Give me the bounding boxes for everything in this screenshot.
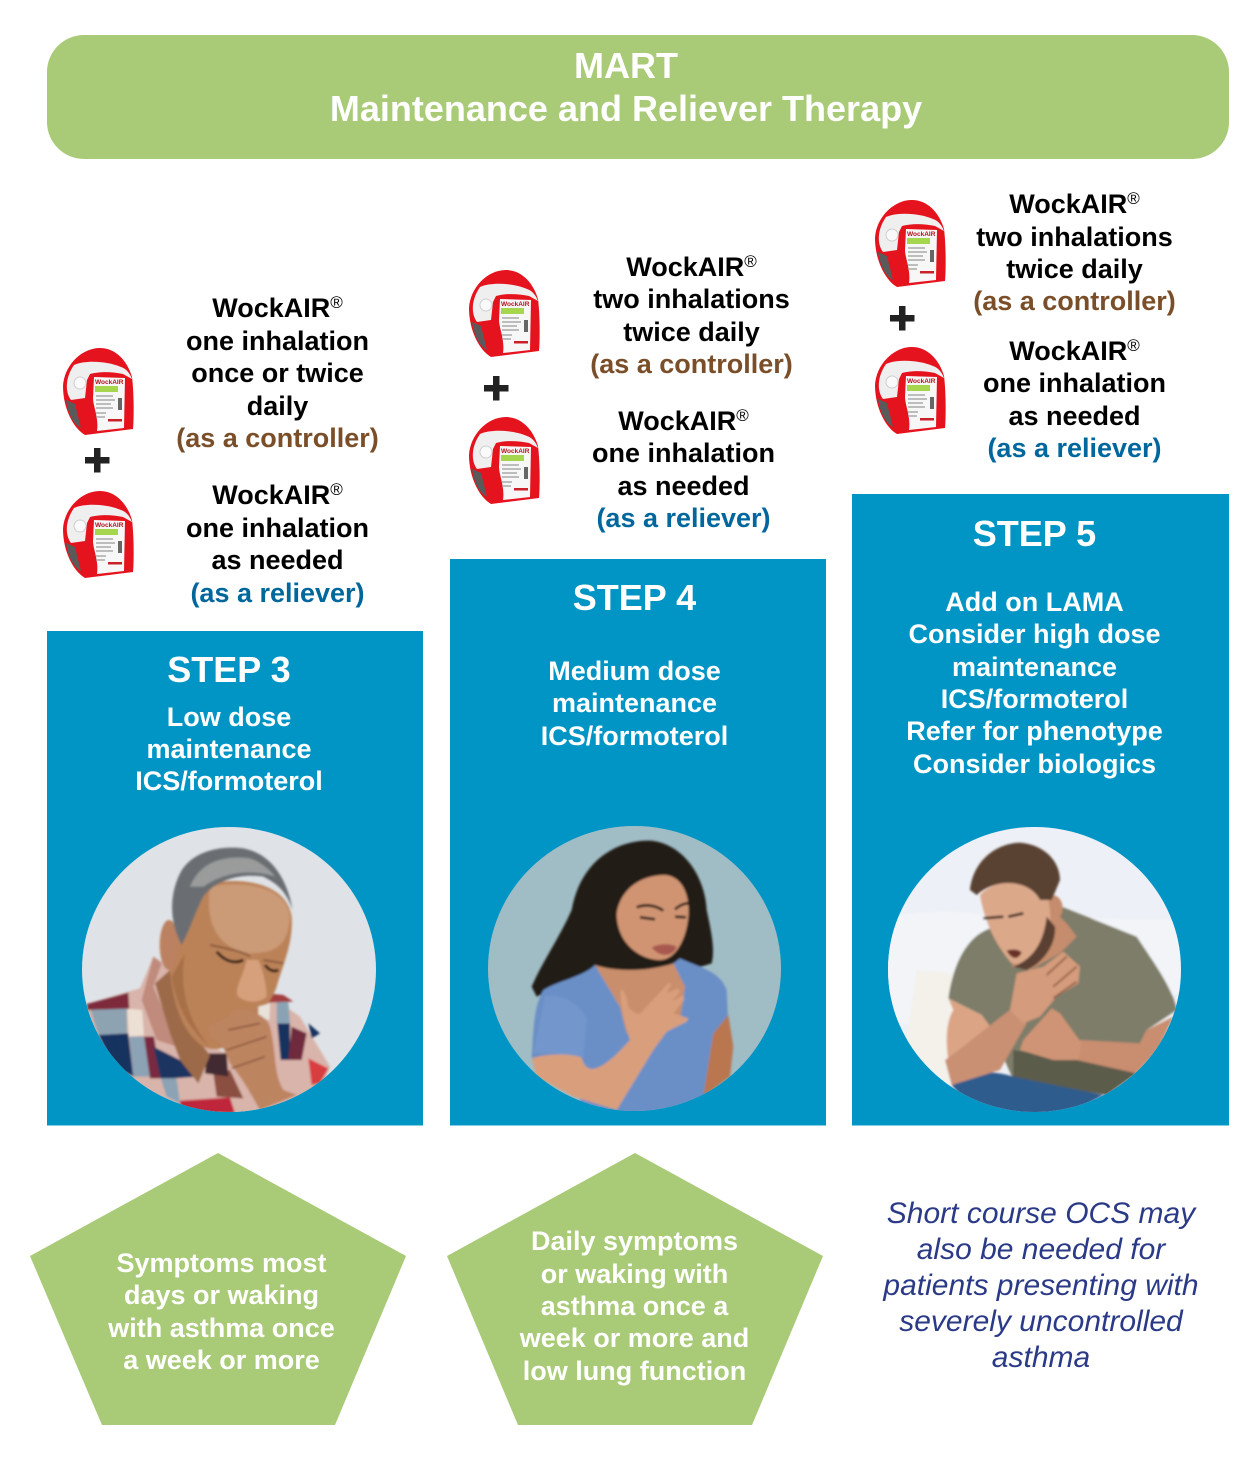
icon: inhaler step 4 controller: [469, 270, 540, 357]
panel: step 4: STEP 4: [573, 577, 696, 618]
panel: step 5: [852, 494, 1229, 1126]
title banner: Maintenance and Reliever Therapy: [330, 88, 922, 129]
icon: inhaler step 3 reliever: [63, 491, 134, 578]
reliever dose text: step 3: ®: [330, 480, 343, 499]
panel: step 5: maintenance: [952, 652, 1117, 682]
panel: step 3: STEP 3: [167, 649, 291, 690]
pentagon callout: step 4 symptoms: Daily symptoms: [531, 1226, 738, 1256]
panel: step 3: ICS/formoterol: [135, 766, 323, 796]
pentagon callout: step 3 symptoms: a week or more: [123, 1345, 320, 1375]
reliever dose text: step 4: as needed: [617, 471, 750, 501]
controller dose text: step 5: two inhalations: [976, 222, 1173, 252]
pentagon callout: step 3 symptoms: days or waking: [124, 1280, 319, 1310]
panel: step 5: Consider biologics: [913, 749, 1156, 779]
controller dose text: step 3: WockAIR: [212, 293, 330, 323]
reliever dose text: step 4: [592, 406, 775, 533]
icon: inhaler step 3 controller: [63, 348, 134, 435]
controller dose text: step 5: ®: [1127, 189, 1140, 208]
controller dose text: step 3: [176, 293, 379, 453]
reliever dose text: step 3: as needed: [211, 545, 344, 575]
controller dose text: step 5: WockAIR: [1009, 189, 1127, 219]
panel: step 3: maintenance: [146, 734, 312, 764]
icon: inhaler step 5 controller: WockAIR: [907, 231, 936, 238]
panel: step 3: Low dose: [167, 702, 291, 732]
controller dose text: step 4: ®: [744, 252, 757, 271]
controller dose text: step 4: (as a controller): [590, 349, 793, 379]
controller dose text: step 4: two inhalations: [593, 284, 790, 314]
panel: step 4: maintenance: [552, 688, 717, 718]
icon: plus step 3: [85, 448, 110, 472]
reliever dose text: step 5: ®: [1127, 336, 1140, 355]
panel: step 4: [450, 559, 826, 1126]
icon: inhaler step 5 controller: [875, 200, 946, 287]
panel: step 5: ICS/formoterol: [941, 684, 1128, 714]
panel: step 5: STEP 5: [973, 513, 1096, 554]
pentagon callout: step 3 symptoms: Symptoms most: [116, 1248, 327, 1278]
icon: inhaler step 3 reliever: WockAIR: [95, 522, 124, 529]
italic note: short course OCS: asthma: [992, 1341, 1090, 1374]
icon: inhaler step 4 reliever: WockAIR: [501, 448, 530, 455]
pentagon callout: step 3 symptoms: with asthma once: [107, 1313, 335, 1343]
italic note: short course OCS: also be needed for: [917, 1233, 1166, 1266]
panel: step 3: [47, 631, 423, 1126]
controller dose text: step 3: once or twice: [191, 358, 364, 388]
title banner: [47, 35, 1229, 159]
reliever dose text: step 3: [186, 480, 369, 608]
controller dose text: step 5: twice daily: [1006, 254, 1143, 284]
reliever dose text: step 4: ®: [736, 406, 749, 425]
icon: plus step 4: [484, 376, 508, 400]
controller dose text: step 3: ®: [330, 293, 343, 312]
italic note: short course OCS: Short course OCS may: [887, 1197, 1197, 1230]
photo: older man coughing: [80, 825, 378, 1120]
panel: step 5: Consider high dose: [908, 619, 1161, 649]
icon: plus step 5: [890, 306, 914, 330]
reliever dose text: step 5: as needed: [1008, 401, 1141, 431]
pentagon callout: step 4 symptoms: asthma once a: [541, 1291, 729, 1321]
reliever dose text: step 3: one inhalation: [186, 513, 369, 543]
icon: inhaler step 4 reliever: [469, 417, 540, 504]
reliever dose text: step 4: (as a reliever): [596, 503, 771, 533]
reliever dose text: step 3: (as a reliever): [190, 578, 365, 608]
pentagon callout: step 4 symptoms: [447, 1153, 823, 1425]
pentagon callout: step 4 symptoms: or waking with: [541, 1259, 728, 1289]
controller dose text: step 4: twice daily: [623, 317, 760, 347]
reliever dose text: step 5: one inhalation: [983, 368, 1166, 398]
controller dose text: step 3: daily: [247, 391, 308, 421]
controller dose text: step 5: (as a controller): [973, 286, 1176, 316]
reliever dose text: step 4: WockAIR: [618, 406, 736, 436]
icon: inhaler step 5 reliever: WockAIR: [907, 378, 936, 385]
icon: inhaler step 4 controller: WockAIR: [501, 301, 530, 308]
photo: woman holding chest: [486, 824, 784, 1120]
italic note: short course OCS: [882, 1197, 1199, 1374]
reliever dose text: step 5: (as a reliever): [987, 433, 1162, 463]
controller dose text: step 4: [590, 252, 793, 379]
panel: step 4: Medium dose: [548, 656, 721, 686]
pentagon callout: step 3 symptoms: [30, 1153, 406, 1425]
title banner: MART: [574, 45, 678, 86]
reliever dose text: step 3: WockAIR: [212, 480, 330, 510]
reliever dose text: step 5: WockAIR: [1009, 336, 1127, 366]
controller dose text: step 5: [973, 189, 1176, 316]
pentagon callout: step 4 symptoms: low lung function: [523, 1356, 746, 1386]
icon: inhaler step 3 controller: WockAIR: [95, 379, 124, 386]
controller dose text: step 3: (as a controller): [176, 423, 379, 453]
italic note: short course OCS: patients presenting with: [882, 1269, 1199, 1302]
controller dose text: step 4: WockAIR: [626, 252, 744, 282]
icon: inhaler step 5 reliever: [875, 347, 946, 434]
panel: step 5: Add on LAMA: [945, 587, 1124, 617]
controller dose text: step 3: one inhalation: [186, 326, 369, 356]
panel: step 5: Refer for phenotype: [906, 716, 1163, 746]
reliever dose text: step 4: one inhalation: [592, 438, 775, 468]
photo: man holding chest: [886, 825, 1184, 1120]
panel: step 4: ICS/formoterol: [541, 721, 728, 751]
reliever dose text: step 5: [983, 336, 1166, 463]
pentagon callout: step 4 symptoms: week or more and: [519, 1323, 749, 1353]
italic note: short course OCS: severely uncontrolled: [899, 1305, 1184, 1338]
